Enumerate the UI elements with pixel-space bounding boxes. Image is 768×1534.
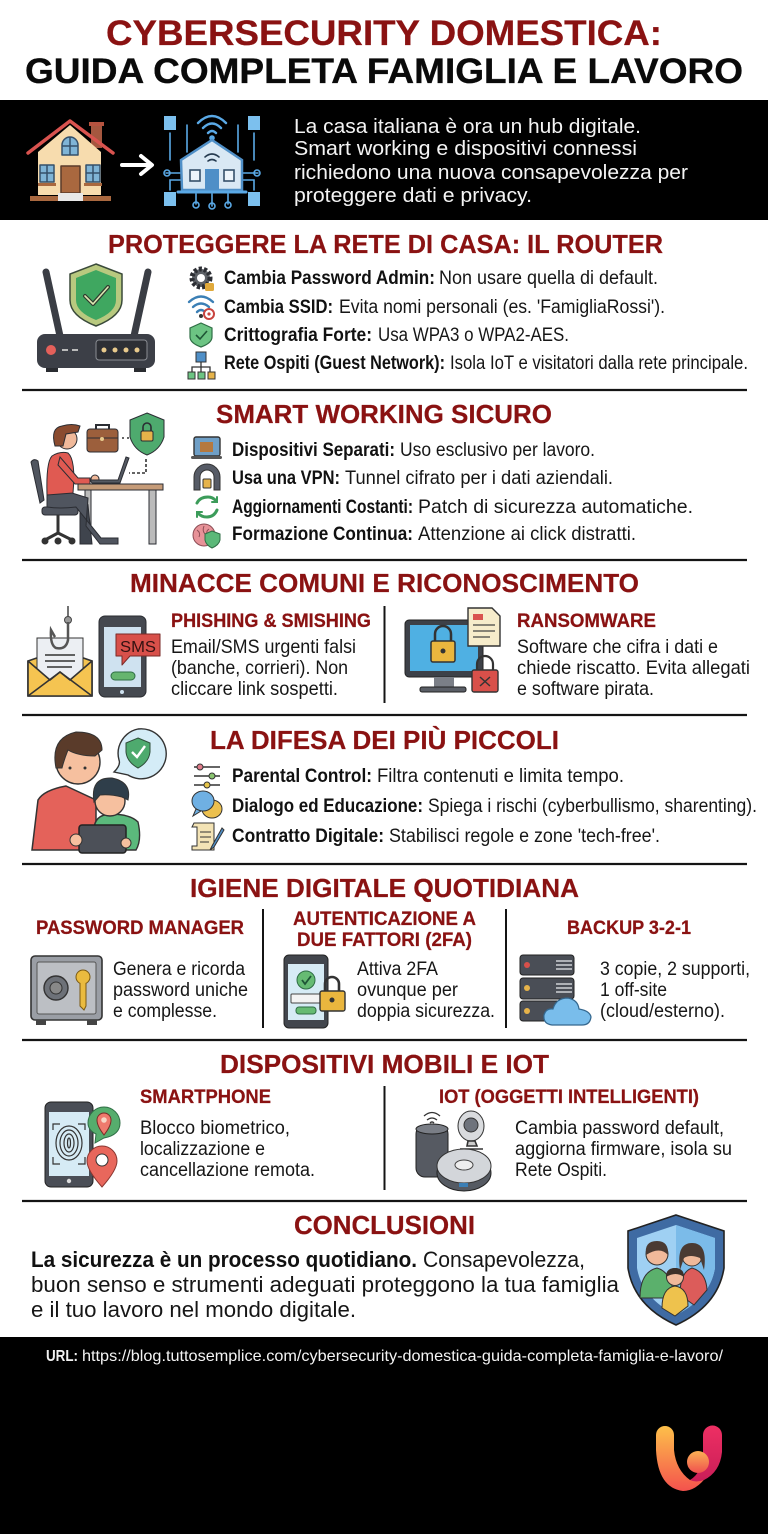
column: 2FA: AUTENTICAZIONE A <box>293 909 476 930</box>
item: VPN: Tunnel cifrato per i dati aziendali. <box>345 468 613 489</box>
item: separate devices <box>191 437 595 461</box>
item: encryption: Crittografia Forte: <box>224 325 372 346</box>
phishing text <box>171 611 371 700</box>
phishing text: (banche, corrieri). Non <box>171 657 348 679</box>
column: smartphone: Blocco biometrico, <box>140 1118 290 1139</box>
item: SSID: Cambia SSID: <box>224 297 333 318</box>
panel: children <box>32 725 757 853</box>
conclusion text <box>31 1247 619 1322</box>
item: training: Formazione Continua: <box>232 524 413 545</box>
intro text: La casa italiana è ora un hub digitale. <box>294 115 641 138</box>
item: password admin: Non usare quella di default. <box>439 268 658 289</box>
icon: parent and child with tablet <box>32 729 166 853</box>
panel: conclusions <box>31 1210 724 1325</box>
item: parental control: Filtra contenuti e limita tempo. <box>377 766 624 787</box>
conclusion text: buon senso e strumenti adeguati proteggono la tua famiglia <box>31 1272 619 1297</box>
item: training: Attenzione ai click distratti. <box>418 524 636 545</box>
item: VPN: Usa una VPN: <box>232 468 340 489</box>
item: encryption: Usa WPA3 o WPA2-AES. <box>378 325 569 346</box>
arrow <box>122 156 152 174</box>
item: dialogue: Dialogo ed Educazione: <box>232 796 423 817</box>
intro text: Smart working e dispositivi connessi <box>294 137 637 160</box>
item: updates <box>197 496 693 518</box>
column: backup: 1 off-site <box>600 980 667 1001</box>
column: IoT: aggiorna firmware, isola su <box>515 1139 732 1160</box>
item: guest network <box>188 352 748 379</box>
column: backup: 3 copie, 2 supporti, <box>600 959 750 980</box>
column: smartphone <box>45 1087 315 1187</box>
column: 2FA: doppia sicurezza. <box>357 1001 495 1022</box>
intro text: proteggere dati e privacy. <box>294 184 532 207</box>
item: password admin <box>192 268 658 291</box>
column: IoT: IOT (OGGETTI INTELLIGENTI) <box>439 1087 699 1108</box>
footer band <box>0 1337 768 1534</box>
intro text <box>294 115 688 207</box>
item: password admin: Cambia Password Admin: <box>224 268 435 289</box>
column: smartphone: SMARTPHONE <box>140 1087 271 1108</box>
column: 2FA: DUE FATTORI (2FA) <box>297 930 472 951</box>
ransomware text <box>517 611 750 700</box>
icon: ransomware computer <box>405 608 500 692</box>
column: smartphone: cancellazione remota. <box>140 1160 315 1181</box>
column: 2FA: ovunque per <box>357 980 459 1001</box>
icon: servers and cloud <box>520 955 591 1025</box>
column: IoT: Rete Ospiti. <box>515 1160 607 1181</box>
item: training <box>193 524 636 548</box>
item: parental control <box>194 764 624 788</box>
column: IoT: Cambia password default, <box>515 1118 724 1139</box>
item: updates: Patch di sicurezza automatiche. <box>418 496 693 518</box>
column: smartphone: localizzazione e <box>140 1139 265 1160</box>
item: SSID <box>189 296 665 319</box>
icon: phishing email and SMS: SMS <box>120 639 156 656</box>
source URL: https://blog.tuttosemplice.com/cybersecurity-domestica-guida-completa-famiglia-e-lavoro/ <box>82 1348 724 1365</box>
ransomware text: e software pirata. <box>517 678 654 700</box>
panel: threats <box>28 568 750 703</box>
item: VPN <box>194 464 613 490</box>
column: password manager: password uniche <box>113 980 248 1001</box>
source URL: URL: <box>46 1348 78 1365</box>
icon: phone with lock <box>284 955 345 1028</box>
item: guest network: Rete Ospiti (Guest Network): <box>224 353 445 374</box>
phishing text: cliccare link sospetti. <box>171 678 338 700</box>
item: contract <box>192 823 660 850</box>
column: 2FA <box>284 909 495 1028</box>
panel: router <box>37 229 748 379</box>
icon: safe with key <box>31 956 102 1025</box>
icon: phone with fingerprint and pins <box>45 1102 120 1187</box>
heading: LA DIFESA DEI PIÙ PICCOLI <box>210 725 559 755</box>
icon: phishing email and SMS <box>28 606 160 697</box>
panel: smart working <box>31 399 693 548</box>
panel: digital hygiene <box>31 873 750 1028</box>
phishing text: PHISHING & SMISHING <box>171 611 371 632</box>
item: dialogue <box>192 791 757 818</box>
conclusion text: La sicurezza è un processo quotidiano. <box>31 1247 417 1272</box>
conclusion text: e il tuo lavoro nel mondo digitale. <box>31 1297 356 1322</box>
column: password manager: PASSWORD MANAGER <box>36 918 244 939</box>
column: password manager: Genera e ricorda <box>113 959 245 980</box>
heading: DISPOSITIVI MOBILI E IOT <box>220 1049 549 1079</box>
phishing text: Email/SMS urgenti falsi <box>171 636 356 658</box>
panel: mobile and IoT <box>45 1049 732 1191</box>
item: separate devices: Dispositivi Separati: <box>232 440 395 461</box>
conclusion text: Consapevolezza, <box>423 1247 585 1272</box>
column: backup: (cloud/esterno). <box>600 1001 725 1022</box>
heading: SMART WORKING SICURO <box>216 399 552 429</box>
item: SSID: Evita nomi personali (es. 'FamigliaRossi'). <box>339 297 665 318</box>
icon: speaker webcam robot vacuum <box>416 1111 491 1191</box>
heading: MINACCE COMUNI E RICONOSCIMENTO <box>130 568 639 598</box>
logo <box>656 1426 722 1491</box>
heading: IGIENE DIGITALE QUOTIDIANA <box>190 873 579 903</box>
icon: person at desk <box>31 413 164 544</box>
title: CYBERSECURITY DOMESTICA: <box>106 14 662 53</box>
intro band <box>0 100 768 220</box>
ransomware text: Software che cifra i dati e <box>517 636 718 658</box>
item: contract: Stabilisci regole e zone 'tech-free'. <box>389 826 660 847</box>
item: separate devices: Uso esclusivo per lavoro. <box>400 440 595 461</box>
column: backup: BACKUP 3-2-1 <box>567 918 691 939</box>
title: GUIDA COMPLETA FAMIGLIA E LAVORO <box>25 52 743 91</box>
item: parental control: Parental Control: <box>232 766 372 787</box>
column: password manager <box>31 918 248 1025</box>
ransomware text: chiede riscatto. Evita allegati <box>517 657 750 679</box>
heading: CONCLUSIONI <box>294 1210 475 1240</box>
column: password manager: e complesse. <box>113 1001 217 1022</box>
intro text: richiedono una nuova consapevolezza per <box>294 161 688 184</box>
column: backup <box>520 918 750 1025</box>
icon: router with shield <box>37 264 155 372</box>
column: 2FA: Attiva 2FA <box>357 959 438 980</box>
item: contract: Contratto Digitale: <box>232 826 384 847</box>
ransomware text: RANSOMWARE <box>517 611 656 632</box>
icon: family shield <box>628 1215 724 1325</box>
icon: traditional house <box>28 121 113 201</box>
icon: smart house hub <box>164 116 260 209</box>
item: updates: Aggiornamenti Costanti: <box>232 497 413 518</box>
heading: PROTEGGERE LA RETE DI CASA: IL ROUTER <box>108 229 663 259</box>
item: encryption <box>190 323 569 347</box>
column: IoT <box>416 1087 732 1191</box>
title <box>25 14 743 91</box>
